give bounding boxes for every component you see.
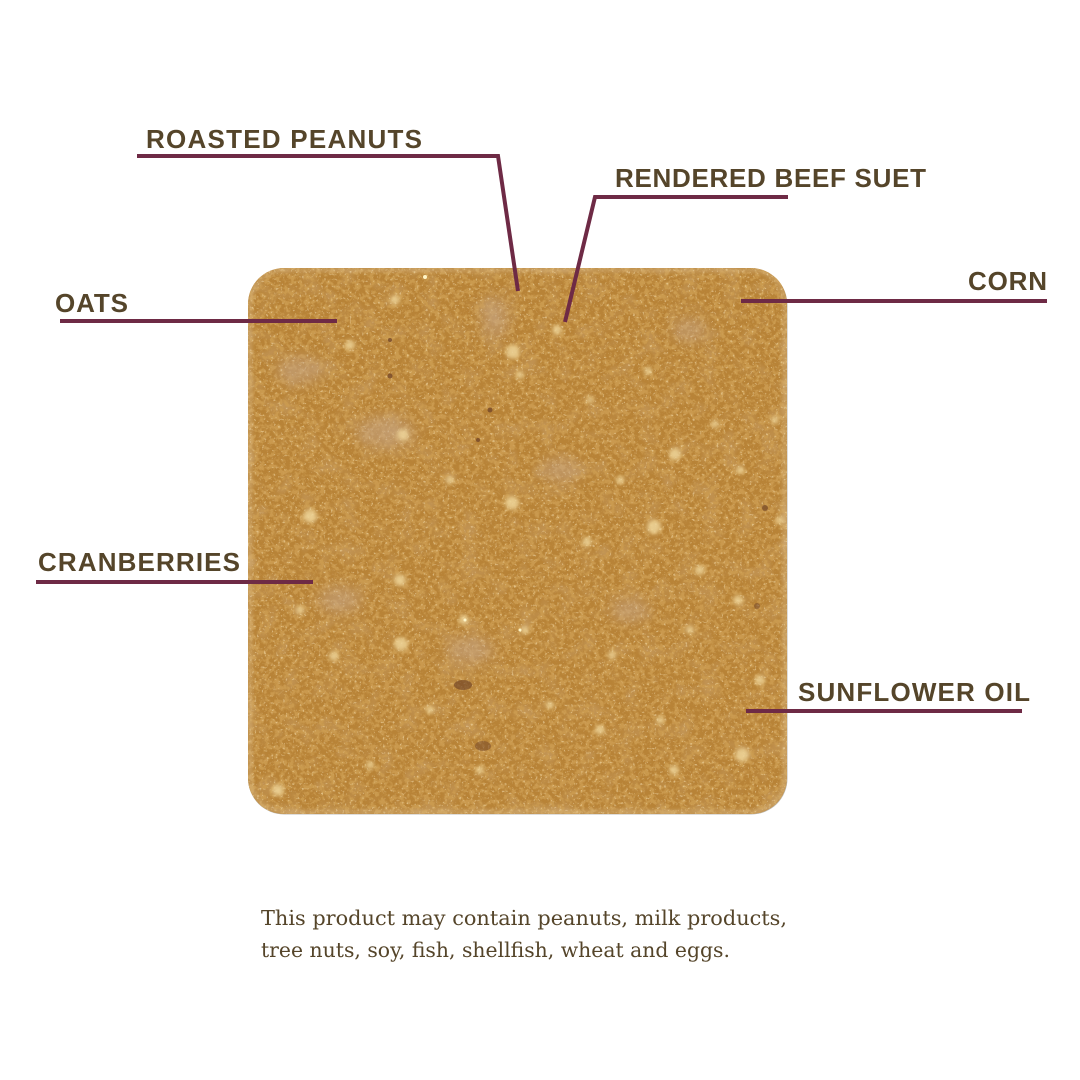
- label: rendered beef suet: [565, 163, 926, 322]
- label: oats: OATS: [55, 288, 128, 318]
- allergen note: This product may contain peanuts, milk products,: [261, 906, 787, 930]
- allergen note: [261, 906, 787, 962]
- allergen note: tree nuts, soy, fish, shellfish, wheat and eggs.: [261, 938, 730, 962]
- label: rendered beef suet: RENDERED BEEF SUET: [615, 163, 926, 193]
- panel: ingredient bar: [248, 268, 788, 814]
- label: roasted peanuts: [137, 124, 518, 291]
- label: cranberries: CRANBERRIES: [38, 547, 240, 577]
- label: corn: CORN: [968, 266, 1047, 296]
- label: sunflower oil: SUNFLOWER OIL: [798, 677, 1030, 707]
- label: roasted peanuts: ROASTED PEANUTS: [146, 124, 422, 154]
